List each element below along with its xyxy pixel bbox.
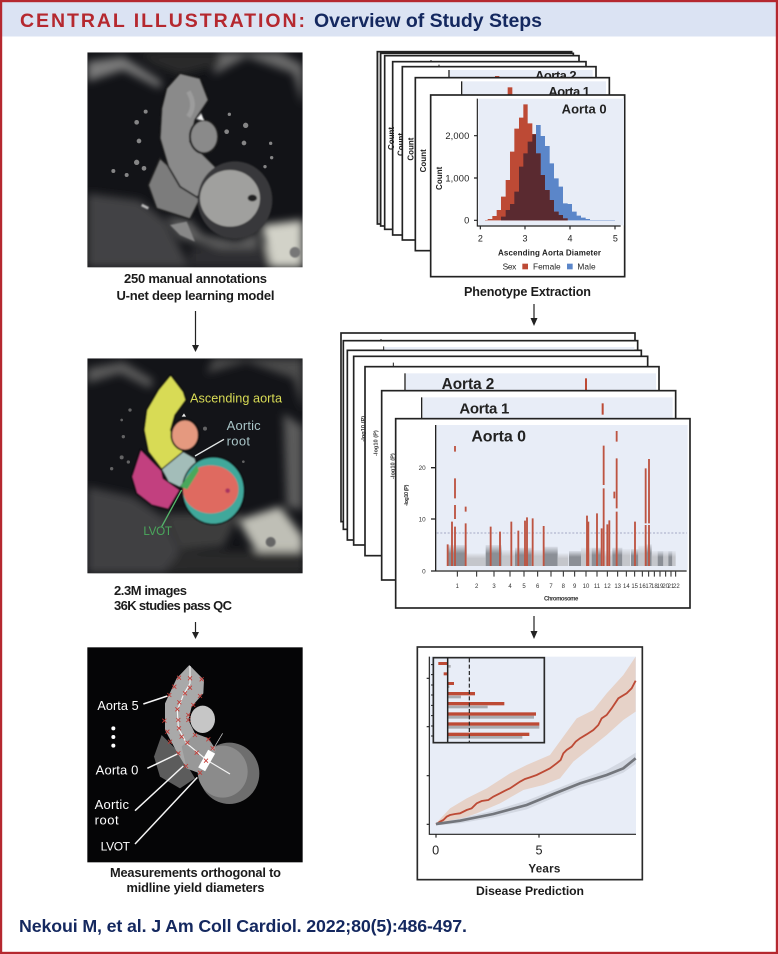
- title: Overview of Study Steps: [314, 10, 542, 32]
- histogram stack: Count: [387, 127, 396, 150]
- Manhattan card: Aorta 0: -log10 (P): [404, 485, 410, 506]
- Manhattan card: Aorta 0: 10: [419, 516, 426, 523]
- histogram card: Aorta 1: [415, 78, 609, 251]
- Manhattan card: Aorta 1: [374, 391, 676, 580]
- label: LVOT: LVOT: [101, 840, 131, 854]
- MRI image: raw cardiac scan: [87, 52, 303, 267]
- arrow: GWAS to prediction: [530, 616, 538, 639]
- histogram stack: [377, 52, 625, 277]
- caption: annotations: [116, 271, 274, 303]
- segment: pulmonary artery: [171, 420, 199, 450]
- aorta segment: [165, 665, 216, 773]
- Manhattan card: Aorta 0: Chromosome: [544, 597, 579, 603]
- overlap: [501, 134, 568, 220]
- arrow: segmentation to measurement: [192, 622, 199, 639]
- axes: [474, 99, 621, 229]
- segment: ascending aorta: [144, 375, 186, 469]
- label: Aortic root: root: [95, 812, 119, 827]
- label: LVOT: LVOT: [143, 525, 172, 538]
- segment: left atrium: [132, 449, 180, 509]
- inset forest chart: [431, 658, 544, 743]
- Manhattan card: Aorta 1: -log10 (P): [374, 430, 380, 456]
- caption: annotations: 250 manual annotations: [124, 271, 267, 286]
- diameter marks: [162, 676, 215, 775]
- left ventricle: [198, 743, 259, 804]
- LVOT measurement: [202, 752, 212, 769]
- histogram card: Aorta 0: Count: [435, 166, 444, 190]
- histogram card: Aorta 0: [431, 95, 625, 277]
- back Manhattan cards: [341, 333, 648, 545]
- caption: QC: 2.3M images: [114, 583, 187, 598]
- histogram card: Aorta 0: 1,000: [445, 173, 469, 183]
- label: aortic root: Aortic: [227, 418, 261, 433]
- caption: disease prediction: Disease Prediction: [476, 884, 584, 898]
- caption: phenotype extraction: Phenotype Extraction: [464, 285, 591, 299]
- histogram stack: Count: [396, 133, 405, 156]
- Manhattan card: Aorta 0: 13: [614, 584, 622, 590]
- Manhattan card: Aorta 0: [390, 419, 690, 608]
- caption: measurements: [110, 865, 281, 895]
- segment: LVOT: [180, 465, 199, 489]
- pulmonary artery: [190, 706, 215, 733]
- back histogram cards: [377, 52, 586, 235]
- citation: Nekoui M, et al. J Am Coll Cardiol. 2022;80(5):486-497.: [19, 916, 467, 936]
- midline: [177, 666, 230, 774]
- segment: left ventricle wall: [182, 457, 244, 524]
- Manhattan card: Aorta 0: 11: [594, 584, 601, 590]
- Manhattan stack: [341, 333, 690, 608]
- caption: QC: 36K studies pass QC: [114, 598, 233, 613]
- Manhattan card: Aorta 0: 14: [623, 584, 630, 590]
- caption: measurements: Measurements orthogonal to: [110, 865, 281, 880]
- histogram card: Aorta 0: 3: [522, 234, 527, 244]
- histogram card: Aorta 0: 2: [478, 234, 483, 244]
- histogram card: Aorta 0: 0: [464, 216, 469, 226]
- Manhattan card: Aorta 0: 20: [419, 465, 426, 472]
- legend: Female: [533, 261, 561, 271]
- header band: [0, 0, 778, 36]
- label: Aortic root: Aortic: [95, 797, 129, 812]
- histogram card: Aorta 2: Count: [406, 137, 415, 161]
- arrow: annotations to segmentation: [192, 311, 199, 352]
- Manhattan card: Aorta 0: 7: [549, 584, 553, 590]
- Manhattan card: Aorta 0: 4: [508, 584, 512, 590]
- Manhattan card: Aorta 0: 9: [573, 584, 577, 590]
- disease prediction chart: 0: [432, 844, 439, 858]
- label: Aorta 5: Aorta 5: [97, 699, 139, 713]
- significance threshold: [437, 532, 687, 534]
- legend: [503, 261, 596, 271]
- histogram card: Aorta 0: 2,000: [445, 131, 469, 141]
- histogram card: Aorta 0: 5: [613, 234, 618, 244]
- disease prediction chart: [417, 647, 642, 880]
- significant loci: [448, 431, 649, 566]
- Manhattan card: Aorta 0: 22: [673, 584, 680, 590]
- Manhattan background points: [447, 544, 676, 566]
- Manhattan card: Aorta 0: -log10 (P): [390, 453, 396, 479]
- measurement panel: [87, 647, 303, 862]
- Manhattan card: Aorta 0: Aorta 0: [471, 429, 526, 446]
- female distribution: [485, 104, 568, 220]
- label: aortic root: root: [227, 433, 250, 448]
- Manhattan card: Aorta 0: 18: [651, 584, 658, 590]
- histogram card: Aorta 1: Aorta 1: [548, 84, 590, 99]
- Manhattan card: Aorta 1: Aorta 1: [459, 400, 509, 417]
- curve: controls: [436, 758, 636, 824]
- Manhattan card: Aorta 0: 1: [456, 584, 460, 590]
- histogram card: Aorta 2: Aorta 2: [535, 68, 577, 83]
- confidence band: controls: [436, 753, 636, 825]
- label: ascending aorta: Ascending aorta: [190, 392, 283, 406]
- disease prediction chart: Years: [528, 863, 560, 876]
- disease prediction chart: 5: [535, 844, 543, 858]
- histogram card: Aorta 0: Aorta 0: [562, 102, 607, 117]
- histogram card: Aorta 2: [402, 67, 596, 240]
- left atrium: [154, 735, 195, 788]
- caption: QC: [114, 583, 233, 613]
- caption: measurements: midline yield diameters: [126, 880, 264, 895]
- Manhattan card: Aorta 2: Aorta 2: [442, 376, 494, 393]
- histogram card: Aorta 0: 4: [567, 234, 572, 244]
- Manhattan card: Aorta 0: 15: [631, 584, 639, 590]
- arrow: phenotype to GWAS: [530, 304, 538, 326]
- label: Aorta 0: Aorta 0: [96, 762, 138, 777]
- segment: aortic root: [162, 452, 197, 487]
- leader lines: [135, 696, 197, 844]
- male distribution: [501, 125, 615, 220]
- legend: Male: [577, 261, 596, 271]
- Manhattan card: Aorta 0: 20: [662, 584, 670, 590]
- curve: cases: [436, 681, 636, 824]
- Manhattan card: Aorta 0: 12: [604, 584, 611, 590]
- axes: [431, 425, 687, 571]
- segment: left ventricle cavity: [183, 465, 238, 513]
- Manhattan card: Aorta 0: 2: [475, 584, 479, 590]
- axes: [427, 657, 636, 838]
- Manhattan card: Aorta 2: [361, 367, 659, 556]
- ellipsis dots: [111, 726, 115, 748]
- leader lines: [162, 439, 224, 527]
- Manhattan card: Aorta 0: 6: [536, 584, 540, 590]
- Manhattan card: Aorta 0: 8: [562, 584, 566, 590]
- Manhattan card: Aorta 0: 3: [492, 584, 496, 590]
- Manhattan card: Aorta 0: 0: [422, 568, 426, 575]
- Manhattan card: Aorta 0: 17: [645, 584, 653, 590]
- Manhattan card: Aorta 0: 19: [657, 584, 664, 590]
- histogram card: Aorta 0: Ascending Aorta Diameter: [498, 248, 601, 257]
- Manhattan card: Aorta 0: 16: [639, 584, 646, 590]
- confidence band: cases: [436, 657, 636, 825]
- Manhattan card: Aorta 0: 10: [583, 584, 590, 590]
- legend: Sex: [503, 261, 517, 271]
- caption: annotations: U-net deep learning model: [116, 288, 274, 303]
- segmentation MRI image: [87, 358, 303, 573]
- histogram card: Aorta 1: Count: [419, 149, 428, 172]
- Manhattan card: Aorta 0: 5: [522, 584, 526, 590]
- title: CENTRAL ILLUSTRATION:: [20, 10, 305, 32]
- Manhattan card: Aorta 2: -log10 (P): [361, 416, 367, 442]
- Manhattan card: Aorta 0: 21: [668, 584, 675, 590]
